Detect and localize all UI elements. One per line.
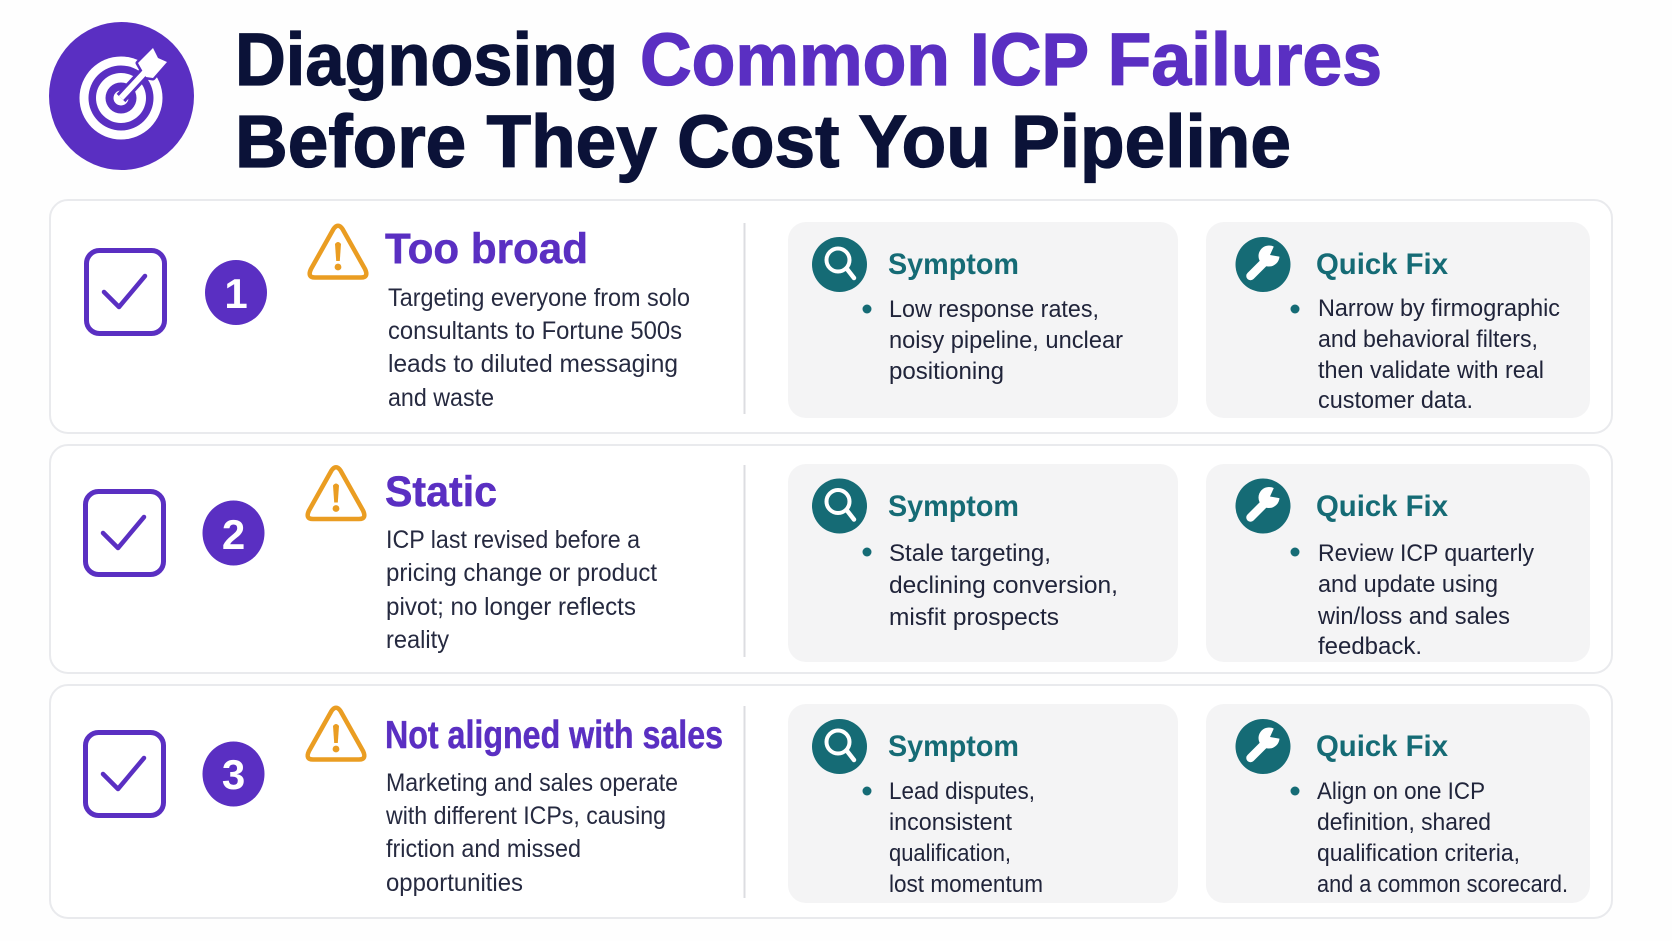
icon: wrench bbox=[1236, 478, 1290, 534]
symptom bullet bbox=[862, 778, 1043, 898]
panel: row 1 too broad bbox=[50, 200, 1612, 433]
icon: magnifier bbox=[812, 478, 867, 534]
panel: row 3 not aligned with sales bbox=[50, 685, 1612, 918]
symptom bullet: noisy pipeline, unclear bbox=[889, 327, 1123, 354]
panel: symptom bbox=[788, 222, 1178, 418]
icon: magnifier bbox=[812, 719, 867, 774]
description: with different ICPs, causing bbox=[385, 802, 666, 830]
number badge 3: 3 bbox=[222, 751, 245, 798]
title: Diagnosing bbox=[235, 18, 618, 101]
quick fix bullet: then validate with real bbox=[1318, 357, 1544, 384]
symptom bullet: Low response rates, bbox=[889, 296, 1099, 323]
symptom bullet: misfit prospects bbox=[889, 604, 1059, 631]
description: and waste bbox=[388, 384, 494, 412]
description bbox=[388, 284, 690, 412]
symptom heading: Symptom bbox=[888, 730, 1019, 763]
quick fix bullet: qualification criteria, bbox=[1317, 840, 1520, 867]
description: ICP last revised before a bbox=[386, 526, 640, 554]
number badge 2: 2 bbox=[222, 511, 245, 558]
symptom heading: Symptom bbox=[888, 248, 1019, 281]
description: friction and missed bbox=[386, 835, 581, 863]
title bbox=[235, 18, 1382, 183]
icon: checkbox bbox=[86, 250, 164, 334]
description: Targeting everyone from solo bbox=[388, 284, 690, 312]
symptom bullet: lost momentum bbox=[889, 871, 1043, 898]
quick fix heading: Quick Fix bbox=[1316, 248, 1448, 281]
heading: Too broad bbox=[385, 225, 588, 273]
quick fix bullet: feedback. bbox=[1318, 633, 1422, 660]
number badge 2 bbox=[202, 500, 264, 566]
description: reality bbox=[386, 626, 449, 654]
icon: warning triangle bbox=[308, 467, 364, 519]
description: pivot; no longer reflects bbox=[386, 593, 636, 621]
description: leads to diluted messaging bbox=[388, 350, 678, 378]
symptom bullet: declining conversion, bbox=[889, 572, 1118, 599]
quick fix bullet: Review ICP quarterly bbox=[1318, 540, 1535, 567]
title: Before They Cost You Pipeline bbox=[235, 100, 1291, 183]
heading: Static bbox=[385, 468, 497, 516]
panel: quick fix bbox=[1206, 464, 1590, 662]
symptom bullet bbox=[862, 296, 1123, 385]
icon: warning triangle bbox=[310, 226, 366, 278]
panel: symptom bbox=[788, 464, 1178, 662]
icon: warning triangle bbox=[308, 708, 364, 760]
quick fix heading: Quick Fix bbox=[1316, 730, 1448, 763]
symptom bullet: inconsistent bbox=[889, 809, 1012, 836]
symptom bullet: qualification, bbox=[889, 840, 1011, 867]
description bbox=[386, 526, 657, 654]
symptom bullet: Lead disputes, bbox=[889, 778, 1035, 805]
symptom heading: Symptom bbox=[888, 490, 1019, 523]
icon: target with arrow bbox=[49, 22, 194, 170]
heading: Not aligned with sales bbox=[385, 714, 723, 757]
quick fix heading: Quick Fix bbox=[1316, 490, 1448, 523]
icon: wrench bbox=[1236, 237, 1290, 292]
card outline bbox=[50, 445, 1612, 673]
quick fix bullet: customer data. bbox=[1318, 387, 1473, 414]
title: Common ICP Failures bbox=[640, 18, 1382, 101]
quick fix bullet: and behavioral filters, bbox=[1318, 326, 1538, 353]
description: consultants to Fortune 500s bbox=[388, 317, 682, 345]
quick fix bullet bbox=[1290, 778, 1568, 898]
description: opportunities bbox=[386, 869, 523, 897]
panel: symptom bbox=[788, 704, 1178, 903]
quick fix bullet: Align on one ICP bbox=[1317, 778, 1485, 805]
description: pricing change or product bbox=[386, 559, 657, 587]
panel: row 2 static bbox=[50, 445, 1612, 673]
symptom bullet bbox=[862, 540, 1118, 631]
card outline bbox=[50, 200, 1612, 433]
symptom bullet: positioning bbox=[889, 358, 1004, 385]
number badge 1: 1 bbox=[224, 270, 248, 317]
icon: checkbox bbox=[86, 492, 164, 574]
quick fix bullet: and a common scorecard. bbox=[1317, 871, 1568, 898]
icon: magnifier bbox=[812, 237, 867, 292]
number badge 1 bbox=[205, 260, 267, 325]
quick fix bullet: win/loss and sales bbox=[1317, 603, 1510, 630]
quick fix bullet: and update using bbox=[1318, 571, 1498, 598]
panel: quick fix bbox=[1206, 704, 1590, 903]
quick fix bullet bbox=[1290, 295, 1560, 414]
description: Marketing and sales operate bbox=[386, 769, 678, 797]
quick fix bullet bbox=[1290, 540, 1535, 660]
quick fix bullet: Narrow by firmographic bbox=[1318, 295, 1560, 322]
number badge 3 bbox=[202, 742, 264, 806]
icon: checkbox bbox=[86, 732, 164, 816]
symptom bullet: Stale targeting, bbox=[889, 540, 1051, 567]
quick fix bullet: definition, shared bbox=[1317, 809, 1491, 836]
icon: wrench bbox=[1236, 719, 1290, 774]
description bbox=[385, 769, 678, 897]
card outline bbox=[50, 685, 1612, 918]
panel: quick fix bbox=[1206, 222, 1590, 418]
